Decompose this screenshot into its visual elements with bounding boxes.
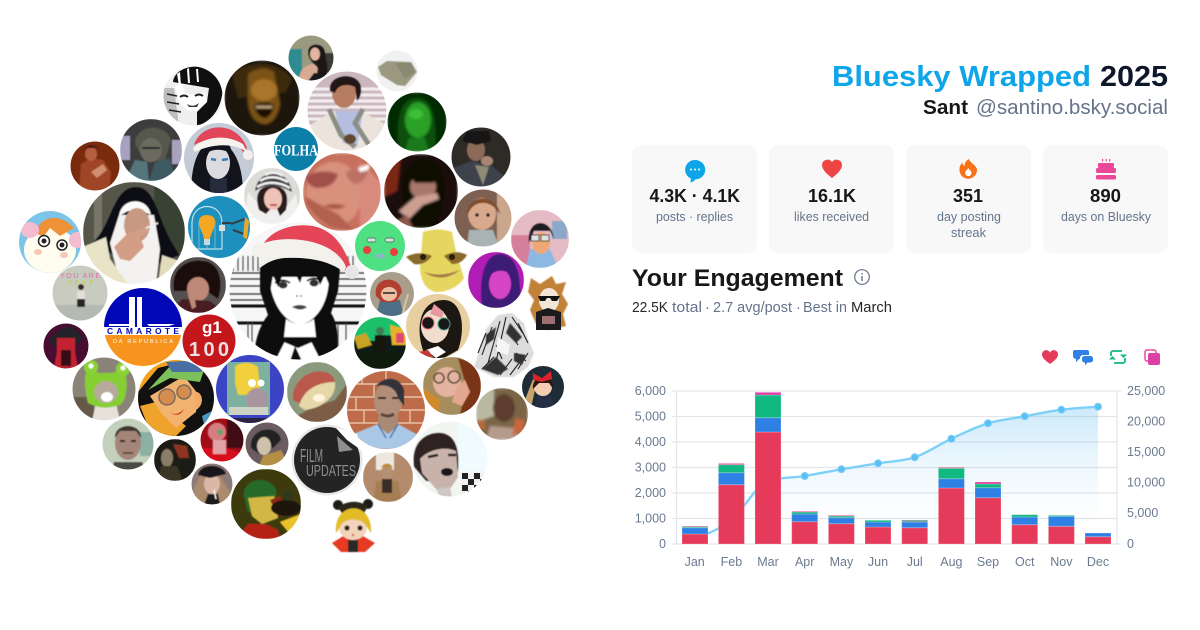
avatar: green cartoon face [355, 221, 405, 271]
avatar: purple portrait [468, 252, 524, 308]
engagement summary: 22.5K [632, 300, 668, 316]
bar: August [938, 467, 964, 544]
left axis labels: 6,000 [635, 384, 666, 398]
month labels: Mar [757, 555, 779, 569]
avatar: beret woman smoking [191, 463, 233, 505]
stat card: days on Bluesky: 890 [1090, 186, 1121, 206]
avatar: baby photo [454, 189, 512, 247]
avatar: anime girl with santa hat [184, 123, 254, 193]
icon: birthday cake [1096, 159, 1116, 180]
avatar: comic woman in green cap [138, 360, 214, 436]
avatar: g1 100 logo: g1 [202, 318, 222, 337]
right axis labels: 10,000 [1127, 476, 1165, 490]
avatar: Camarote logo: CAMAROTE [107, 326, 179, 336]
engagement summary [632, 300, 892, 316]
avatar: Film Updates sticker: FILM [300, 446, 323, 466]
right axis labels: 15,000 [1127, 445, 1165, 459]
avatar: yellow blob with eyes [406, 230, 467, 292]
stat card: days on Bluesky [1043, 145, 1168, 253]
stat card: likes received [769, 145, 894, 253]
icon: chat bubble [685, 160, 705, 182]
avatar: green night-vision [387, 92, 447, 152]
avatar: goth girl selfie [412, 421, 488, 497]
avatar: man at brick wall [347, 371, 425, 449]
stat card: posts and replies: 4.3K · 4.1K [650, 186, 740, 206]
stat card: day posting streak: 351 [953, 186, 983, 206]
avatar: red devil character [43, 323, 89, 369]
avatar: mushroom illustration [287, 362, 347, 422]
avatar: dark vampire face [224, 60, 300, 136]
engagement chart [635, 384, 1165, 569]
icon: heart [822, 160, 842, 178]
icon: replies bubbles [1073, 350, 1093, 366]
avatar: Folha logo [274, 127, 318, 171]
left axis labels: 4,000 [635, 435, 666, 449]
month labels: Jan [685, 555, 705, 569]
bar: January [682, 526, 708, 544]
avatar: manga girl [163, 66, 223, 126]
user name and handle: Sant [923, 97, 968, 119]
bar: June [865, 520, 891, 544]
avatar: dark-haired girl hand on mouth [384, 154, 458, 228]
stat card: posts and replies [632, 145, 757, 253]
chart grid [672, 391, 1121, 544]
title: 2025 [1100, 61, 1168, 93]
avatar: bird cage with lightbulb [188, 196, 250, 258]
bar: May [828, 515, 854, 544]
avatar: man on rust background [70, 141, 120, 191]
engagement summary: total [672, 300, 702, 316]
icon: quotes copy squares [1145, 350, 1160, 365]
cumulative area [695, 407, 1098, 544]
month labels: Apr [795, 555, 814, 569]
user name and handle: @santino.bsky.social [976, 97, 1168, 119]
avatar: cartoon with sunglasses [528, 276, 568, 330]
avatar: black-and-white wolf embrace [474, 313, 534, 377]
icon: reposts arrows [1109, 351, 1127, 363]
left axis labels: 0 [659, 537, 666, 551]
avatar: Film Updates sticker: UPDATES [306, 463, 356, 480]
month labels: May [830, 555, 854, 569]
avatar: large manga girl with santa hat [228, 221, 368, 361]
avatar: nun smoking [83, 182, 185, 284]
avatar: You Are Next photo: YOU ARE [60, 273, 100, 280]
month labels: Sep [977, 555, 999, 569]
stat card: likes received: likes received [794, 209, 869, 224]
stat card: days on Bluesky: days on Bluesky [1061, 209, 1151, 224]
month labels: Dec [1087, 555, 1109, 569]
left axis labels: 3,000 [635, 460, 666, 474]
avatar: green-haired woman with plate [231, 469, 301, 539]
engagement heading: Your Engagement [632, 265, 843, 292]
chart legend [1042, 350, 1160, 366]
avatar: man in tan coat [363, 452, 413, 502]
avatar: Camarote logo: DA REPÚBLICA [113, 338, 173, 345]
bar: March [755, 392, 781, 544]
avatar: cat in frog hat [72, 357, 136, 421]
avatar: rock [376, 50, 418, 92]
avatar: man selfie [102, 418, 154, 470]
month labels: Jul [907, 555, 923, 569]
avatar: neon concert [354, 317, 406, 369]
avatar: Homer painting [216, 355, 284, 423]
avatar: red-haired woman with glasses [423, 357, 481, 415]
engagement summary: March [851, 300, 892, 316]
avatar: dark anime man [120, 119, 182, 181]
stacked monthly bars [682, 392, 1111, 544]
right axis labels: 5,000 [1127, 506, 1158, 520]
month labels: Aug [940, 555, 963, 569]
avatar: doll with tiger ears [332, 499, 375, 552]
month labels: Oct [1015, 555, 1035, 569]
cumulative line [695, 403, 1102, 540]
month labels: Jun [868, 555, 888, 569]
bar: April [792, 511, 818, 544]
stat card: posts and replies: posts · replies [656, 209, 733, 224]
icon: info [855, 270, 869, 284]
avatar: red-haired comic [370, 272, 414, 316]
avatar: pink sunglasses face [303, 153, 381, 231]
avatar: woman waving [476, 388, 528, 440]
month labels: Feb [721, 555, 742, 569]
avatar: anime woman brown [245, 422, 289, 466]
bar: September [975, 482, 1001, 544]
avatar: Kiki cartoon [522, 366, 564, 408]
stat card: day posting streak: streak [951, 225, 986, 240]
avatar: Camarote logo [104, 288, 182, 367]
left axis labels: 1,000 [635, 512, 666, 526]
right axis labels: 0 [1127, 537, 1134, 551]
bar: November [1048, 515, 1074, 544]
right axis labels [1127, 384, 1165, 551]
left axis labels: 2,000 [635, 486, 666, 500]
stat card: likes received: 16.1K [808, 186, 856, 206]
avatar: Folha logo: FOLHA [274, 142, 318, 160]
avatar: red toy [200, 418, 244, 462]
right axis labels: 25,000 [1127, 384, 1165, 398]
avatar: curly-haired woman [170, 257, 226, 313]
avatar: girl in teal room [288, 35, 335, 81]
bar: December [1085, 533, 1111, 544]
month labels [685, 555, 1109, 569]
avatar: man in white suit with chain [307, 71, 387, 151]
right axis labels: 20,000 [1127, 414, 1165, 428]
engagement summary: · [705, 300, 710, 316]
avatar bubble cloud [19, 35, 569, 552]
avatar: Film Updates sticker [292, 424, 362, 496]
engagement summary: · [796, 300, 801, 316]
stat card: day posting streak: day posting [937, 209, 1001, 224]
avatar: You Are Next photo [52, 265, 108, 321]
avatar: dark Japanese illustration [154, 439, 196, 481]
avatar: g1 100 logo: 100 [189, 339, 229, 361]
avatar: hamster cartoon [19, 211, 85, 273]
icon: likes heart [1042, 350, 1058, 364]
stat card: day posting streak [906, 145, 1031, 253]
bar: October [1012, 515, 1038, 544]
month labels: Nov [1050, 555, 1073, 569]
icon: flame [959, 159, 977, 179]
title: Bluesky Wrapped [832, 61, 1091, 93]
avatar: anime girl with pink glasses [406, 294, 470, 358]
avatar: girl in knit hat [244, 168, 300, 224]
avatar: officer smoking [451, 127, 511, 187]
bar: February [718, 463, 744, 544]
avatar: cartoon girl with glasses [511, 210, 569, 268]
left axis labels [635, 384, 666, 551]
engagement summary: Best in [803, 300, 847, 316]
engagement summary: 2.7 avg/post [713, 300, 792, 316]
bar: July [902, 520, 928, 544]
avatar: You Are Next photo: NEXT [67, 280, 94, 287]
avatar: g1 100 logo [182, 314, 236, 368]
left axis labels: 5,000 [635, 410, 666, 424]
